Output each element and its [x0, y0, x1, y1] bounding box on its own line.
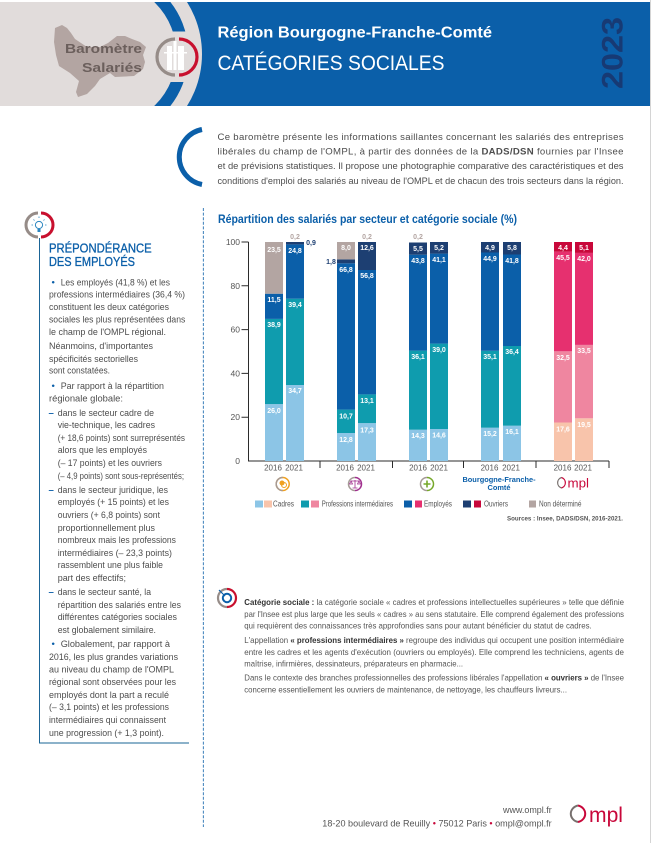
- year labels: 2016: [336, 464, 354, 473]
- icon: santé: [420, 478, 434, 490]
- bars: Bourgogne-Franche-Comté: 36,4: [505, 349, 519, 356]
- y axis: [226, 237, 609, 468]
- bars: santé: 41,1: [432, 257, 446, 264]
- bars: OMPL: 4,4: [558, 245, 568, 252]
- bars: santé: 5,2: [434, 245, 444, 252]
- body text: constituent les deux catégories: [49, 302, 169, 313]
- body text: [48, 277, 185, 739]
- icon: barometer ring: [157, 39, 197, 75]
- bars: OMPL: 17,6: [556, 426, 570, 434]
- year labels: 2016: [409, 464, 427, 473]
- body text: spécificités sectorielles: [49, 354, 138, 365]
- bars: cadre de vie-technique: 39,4: [288, 302, 302, 309]
- definitions text: maîtrise, infirmières, dessinateurs, préparateurs en pharmacie...: [244, 659, 463, 669]
- bars: santé: 39,0: [432, 347, 446, 354]
- intro text: conditions d'emploi des salariés au niveau de l'OMPL et de chacun des trois secteurs dans la région.: [218, 176, 624, 187]
- body text: employés dont la part a reculé: [49, 690, 169, 701]
- bars: OMPL: [554, 242, 593, 461]
- panel: left key findings: [26, 213, 189, 743]
- footer OMPL logo: mpl: [589, 804, 623, 827]
- bars: Bourgogne-Franche-Comté: [481, 242, 521, 461]
- definitions text: L'appellation « professions intermédiaires » regroupe des individus qui occupent une position intermédiaire: [244, 635, 624, 645]
- bars: juridique: 17,3: [360, 428, 374, 434]
- chart title: Répartition des salariés par secteur et catégorie sociale (%): [218, 212, 517, 226]
- bars: OMPL: 32,5: [556, 355, 570, 362]
- intro text: libérales du champ de l'OMPL, à partir des données de la DADS/DSN fournies par l'Insee: [218, 146, 624, 158]
- y axis: 60: [231, 325, 240, 335]
- body text: Néanmoins, d'importantes: [49, 341, 153, 352]
- year labels: 2021: [574, 464, 592, 473]
- region axis label: Comté: [488, 483, 510, 492]
- region title: Région Bourgogne-Franche-Comté: [218, 24, 492, 42]
- body text: Les employés (41,8 %) et les: [61, 277, 170, 288]
- legend: Non déterminé: [539, 500, 582, 509]
- bars: juridique: 12,6: [360, 245, 374, 252]
- stacked bar chart: [226, 234, 623, 523]
- year labels: 2021: [357, 464, 375, 473]
- bars: Bourgogne-Franche-Comté: 4,9: [485, 245, 495, 252]
- bars: Bourgogne-Franche-Comté: 41,8: [505, 258, 519, 265]
- legend: Employés: [424, 500, 452, 509]
- legend: Cadres: [273, 500, 294, 509]
- footer contact: www.ompl.fr: [502, 804, 552, 815]
- intro text: [218, 132, 624, 187]
- body text: nombreux mais les professions: [58, 535, 176, 546]
- body text: sont constatées.: [49, 366, 110, 377]
- bars: juridique: 56,8: [360, 273, 374, 280]
- bars: cadre de vie-technique: 0,2: [290, 234, 300, 241]
- body text: Par rapport à la répartition: [61, 381, 164, 392]
- panel: definition note: [218, 589, 624, 695]
- year labels: [264, 464, 592, 473]
- legend: Ouvriers: [484, 500, 508, 509]
- bars: santé: 5,5: [413, 246, 423, 253]
- bars: OMPL: 5,1: [579, 245, 589, 252]
- bars: juridique: 12,8: [339, 437, 353, 444]
- body text: –: [48, 587, 54, 598]
- body text: vie-technique, les cadres: [58, 420, 155, 431]
- region map with barometer label: Salariés: [82, 60, 142, 75]
- body text: •: [52, 277, 55, 288]
- body text: (+ 18,6 points) sont surreprésentés: [58, 433, 185, 444]
- body text: •: [52, 381, 55, 392]
- body text: professions intermédiaires (36,4 %): [49, 289, 185, 300]
- year labels: 2021: [285, 464, 303, 473]
- heading: PRÉPONDÉRANCE: [49, 241, 152, 256]
- bars: cadre de vie-technique: 0,9: [306, 240, 316, 247]
- legend: [255, 500, 582, 509]
- region map with barometer label: [54, 25, 146, 97]
- inner blue arc: [154, 2, 186, 106]
- report title: CATÉGORIES SOCIALES: [218, 52, 444, 75]
- body text: différentes catégories sociales: [58, 612, 177, 623]
- heading: [49, 241, 152, 269]
- dashed column divider: [202, 208, 204, 827]
- body text: répartition des salariés entre les: [58, 600, 181, 611]
- region axis label: [462, 475, 536, 492]
- bars: cadre de vie-technique: 38,9: [267, 322, 281, 329]
- footer contact: 18-20 boulevard de Reuilly • 75012 Paris • ompl@ompl.fr: [322, 818, 552, 829]
- bars: Bourgogne-Franche-Comté: 15,2: [483, 431, 497, 438]
- bars: Bourgogne-Franche-Comté: 16,1: [505, 429, 519, 436]
- body text: intermédiaires (– 23,3 points): [58, 548, 172, 559]
- body text: Globalement, par rapport à: [61, 639, 171, 650]
- y axis: 80: [231, 281, 240, 291]
- body text: dans le secteur juridique, les: [58, 485, 168, 496]
- definitions text: [244, 597, 624, 695]
- body text: (– 3,1 points) et les professions: [49, 702, 169, 713]
- body text: ouvriers (+ 6,8 points) sont: [58, 510, 160, 521]
- bars: OMPL: 19,5: [577, 422, 591, 429]
- bars: santé: 14,6: [432, 432, 446, 440]
- bars: santé: [409, 234, 448, 461]
- region axis label: Bourgogne-Franche-: [462, 475, 536, 484]
- body text: dans le secteur santé, la: [58, 587, 152, 598]
- bars: cadre de vie-technique: 11,5: [267, 297, 281, 304]
- body text: proportionnellement plus: [58, 523, 155, 534]
- year labels: 2016: [554, 464, 572, 473]
- intro text: et de prévisions statistiques. Il propose une photographie comparative des caractéristiques et des: [218, 161, 624, 172]
- body text: (– 17 points) et les ouvriers: [58, 458, 162, 469]
- body text: intermédiaires qui connaissent: [49, 715, 166, 726]
- bars: juridique: 1,8: [326, 259, 336, 266]
- footer OMPL logo: [571, 804, 623, 827]
- body text: 2016, les plus grandes variations: [49, 652, 178, 663]
- body text: part des effectifs;: [58, 573, 126, 584]
- bars: santé: 0,2: [413, 234, 423, 241]
- bars: Bourgogne-Franche-Comté: 35,1: [483, 354, 497, 361]
- icon: target: [218, 589, 236, 607]
- body text: rassemblent une plus faible: [58, 560, 163, 571]
- bars: OMPL: 45,5: [556, 255, 570, 262]
- bars: santé: 14,3: [411, 433, 425, 440]
- definitions text: Catégorie sociale : la catégorie sociale « cadres et professions intellectuelles supérieures » telle que définie: [244, 597, 624, 607]
- bars: OMPL: 42,0: [577, 256, 591, 263]
- bars: juridique: 66,8: [339, 267, 353, 274]
- y axis: 20: [231, 412, 240, 422]
- bars: Bourgogne-Franche-Comté: 44,9: [483, 256, 497, 263]
- bars: cadre de vie-technique: 26,0: [267, 408, 281, 415]
- icon: cadre de vie-technique: [276, 478, 289, 490]
- icon: light bulb: [26, 213, 53, 237]
- definitions text: qui requièrent des connaissances très approfondies sans pour autant bénéficier du statut de cadres.: [244, 621, 592, 631]
- body text: régional sont observées pour les: [49, 677, 176, 688]
- year labels: 2021: [430, 464, 448, 473]
- body text: est globalement similaire.: [58, 625, 156, 636]
- OMPL axis logo: mpl: [568, 476, 589, 490]
- definitions text: Dans le contexte des branches professionnelles des professions libérales l'appellation « ouvriers » de l'Insee: [244, 673, 624, 683]
- sources: Sources : Insee, DADS/DSN, 2016-2021.: [507, 516, 623, 523]
- body text: régionale globale:: [49, 393, 123, 404]
- bars: cadre de vie-technique: 34,7: [288, 388, 302, 395]
- OMPL axis logo: [558, 476, 589, 490]
- heading: DES EMPLOYÉS: [49, 254, 135, 269]
- body text: employés (+ 15 points) et les: [58, 497, 169, 508]
- bars: santé: 36,1: [411, 354, 425, 361]
- y axis: 0: [235, 456, 240, 466]
- body text: (– 4,9 points) sont sous-représentés;: [58, 471, 184, 482]
- bars: juridique: 0,2: [362, 234, 372, 241]
- body text: sociales les plus représentées dans: [49, 314, 185, 325]
- region map with barometer label: Baromètre: [65, 41, 142, 56]
- header banner: [0, 2, 650, 106]
- body text: •: [52, 639, 55, 650]
- bars: cadre de vie-technique: 23,5: [267, 247, 281, 254]
- body text: –: [48, 408, 54, 419]
- year: 2023: [596, 17, 630, 89]
- bars: cadre de vie-technique: [265, 234, 316, 461]
- year labels: 2016: [264, 464, 282, 473]
- y axis: 100: [226, 237, 240, 247]
- y axis: 40: [231, 368, 240, 378]
- footer contact: [322, 804, 552, 829]
- body text: alors que les employés: [58, 445, 147, 456]
- year labels: 2021: [502, 464, 520, 473]
- icon: juridique: [348, 478, 362, 490]
- bars: juridique: 10,7: [339, 414, 353, 420]
- body text: dans le secteur cadre de: [58, 408, 154, 419]
- bars: Bourgogne-Franche-Comté: 5,8: [507, 245, 517, 252]
- body text: le champ de l'OMPL régional.: [49, 327, 166, 338]
- bars: cadre de vie-technique: 24,8: [288, 248, 302, 255]
- bars: santé: 43,8: [411, 258, 425, 265]
- intro bracket arc: [179, 130, 202, 184]
- legend: Professions intermédiaires: [322, 500, 393, 509]
- body text: une progression (+ 1,3 point).: [49, 728, 164, 739]
- intro text: Ce baromètre présente les informations saillantes concernant les salariés des entreprises: [218, 132, 624, 143]
- definitions text: entre les cadres et les agents d'exécution (ouvriers ou employés). Elle comprend les techniciens, agents de: [244, 647, 624, 657]
- bars: juridique: 8,0: [341, 245, 351, 252]
- bars: OMPL: 33,5: [577, 348, 591, 355]
- body text: –: [48, 485, 54, 496]
- year labels: 2016: [481, 464, 499, 473]
- bars: juridique: [326, 234, 376, 461]
- body text: au niveau du champ de l'OMPL: [49, 665, 175, 676]
- bars: juridique: 13,1: [360, 398, 374, 405]
- definitions text: concerne essentiellement les ouvriers de maintenance, de nettoyage, les chauffeurs livreurs...: [244, 685, 567, 695]
